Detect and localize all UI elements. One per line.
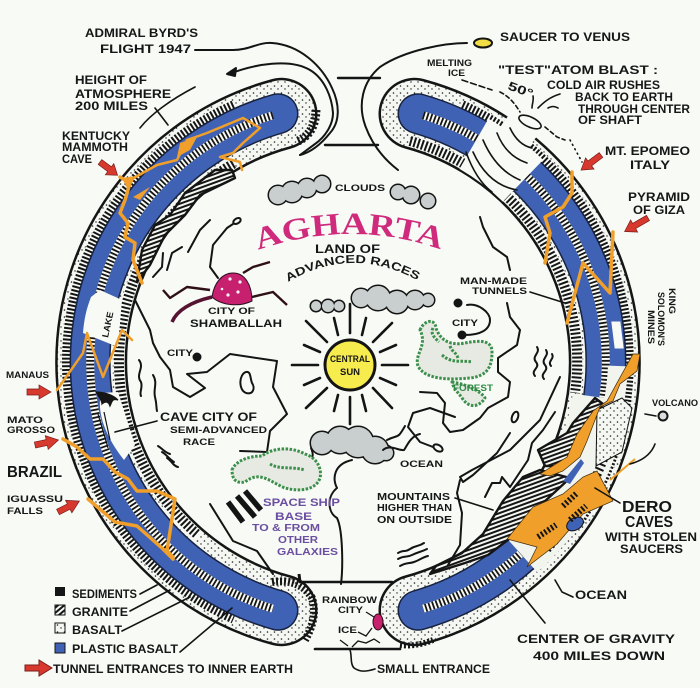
space ship base: BASE — [275, 511, 312, 523]
leader lines — [115, 87, 656, 671]
subtitle: land of advanced races: LAND OF — [315, 242, 380, 256]
forests — [232, 321, 494, 490]
map labels: IGUASSU — [7, 494, 63, 504]
map labels: MATO — [7, 415, 43, 425]
map labels: KING — [667, 288, 677, 314]
map labels: HEIGHT OF — [75, 73, 147, 87]
atom blast shock waves — [462, 80, 582, 192]
map labels: SMALL ENTRANCE — [377, 662, 490, 676]
map labels: WITH STOLEN — [605, 530, 697, 544]
map labels: SEMI-ADVANCED — [170, 425, 268, 435]
map labels: CLOUDS — [335, 183, 385, 193]
map labels: SAUCERS — [620, 542, 683, 556]
map labels: CITY — [167, 348, 193, 358]
map legend: BASALT — [72, 623, 123, 637]
sun: central sun: SUN — [340, 367, 360, 377]
map labels: MANAUS — [6, 370, 49, 380]
sun: central sun: CENTRAL — [330, 354, 370, 364]
map labels: ITALY — [630, 158, 670, 172]
map labels: CITY — [452, 318, 478, 328]
map labels: BRAZIL — [7, 464, 62, 481]
map labels: ON OUTSIDE — [377, 514, 452, 526]
mountains on inner surface — [137, 170, 603, 574]
map labels: PYRAMID — [628, 190, 690, 204]
city of Shamballah: SHAMBALLAH — [190, 318, 282, 330]
orange tunnels — [57, 118, 640, 567]
title: Agharta — [258, 214, 440, 250]
map labels: THROUGH CENTER — [578, 102, 690, 116]
volcano icon — [658, 412, 668, 420]
subtitle: land of advanced races — [288, 242, 420, 282]
cave wall block in Dero region — [596, 398, 632, 466]
city of Shamballah: CITY OF — [208, 306, 256, 316]
cave city shaft — [96, 392, 118, 448]
forests: FOREST — [453, 383, 494, 393]
map labels: "TEST"ATOM BLAST : — [498, 63, 658, 77]
map labels: HIGHER THAN — [377, 502, 452, 514]
map labels: SAUCER TO VENUS — [500, 30, 630, 44]
rainbow city and ice — [299, 574, 383, 647]
map labels: MINES — [646, 310, 656, 344]
map legend: PLASTIC BASALT — [72, 642, 179, 656]
earth crust ring — [67, 105, 629, 645]
map labels: DERO — [622, 499, 672, 516]
label: lake: LAKE — [100, 311, 115, 338]
flight paths and polar lines — [195, 43, 467, 649]
map labels: ADMIRAL BYRD'S — [85, 26, 198, 40]
map legend: TUNNEL ENTRANCES TO INNER EARTH — [53, 662, 293, 676]
map labels: MT. EPOMEO — [605, 144, 690, 158]
map labels: KENTUCKY — [62, 129, 130, 143]
map labels: 50° — [506, 79, 535, 101]
map labels: BACK TO EARTH — [575, 90, 673, 104]
map labels: ATMOSPHERE — [75, 87, 171, 101]
map labels: MOUNTAINS — [377, 491, 450, 503]
map labels: VOLCANO — [652, 398, 698, 408]
sun: central sun — [292, 304, 408, 424]
map labels: RACE — [183, 437, 215, 447]
space ship base: SPACE SHIP — [263, 497, 340, 509]
map labels: MELTING — [427, 58, 472, 68]
title: Agharta: AGHARTA — [258, 214, 440, 250]
saucer to Venus — [474, 38, 492, 48]
red tunnel entrance arrows — [27, 149, 652, 518]
map labels: OCEAN — [575, 588, 627, 602]
map labels: 400 MILES DOWN — [533, 649, 665, 663]
map labels: ICE — [448, 68, 465, 78]
map labels: OF GIZA — [633, 203, 685, 217]
space ship base — [228, 491, 340, 558]
clouds — [269, 176, 435, 463]
map labels: CAVE CITY OF — [160, 410, 257, 424]
space ship base: TO & FROM — [252, 523, 320, 534]
map labels: MAMMOTH — [62, 140, 128, 154]
map labels: SOLOMON'S — [656, 292, 666, 346]
subtitle: land of advanced races: ADVANCED RACES — [288, 255, 420, 282]
map labels: FALLS — [7, 506, 43, 516]
space ship base: GALAXIES — [277, 547, 338, 558]
map labels: CAVE — [62, 152, 92, 166]
map legend — [25, 587, 293, 676]
map labels: COLD AIR RUSHES — [547, 78, 660, 92]
map legend: SEDIMENTS — [72, 587, 137, 601]
map labels: OF SHAFT — [578, 113, 643, 127]
map legend: GRANITE — [72, 605, 128, 619]
map labels: CAVES — [625, 514, 673, 531]
map labels: 200 MILES — [75, 99, 148, 113]
map labels: CENTER OF GRAVITY — [517, 632, 675, 646]
map labels: TUNNELS — [472, 286, 527, 296]
city of Shamballah — [163, 262, 287, 330]
rivers and coast lines — [135, 217, 560, 584]
map labels: MAN-MADE — [460, 276, 527, 286]
map labels: RAINBOW — [322, 595, 378, 605]
space ship base: OTHER — [278, 535, 319, 546]
map labels: FLIGHT 1947 — [100, 42, 191, 56]
map labels: GROSSO — [7, 425, 55, 435]
map labels: OCEAN — [400, 459, 443, 469]
map labels: ICE — [338, 625, 357, 635]
map labels: CITY — [338, 605, 363, 615]
